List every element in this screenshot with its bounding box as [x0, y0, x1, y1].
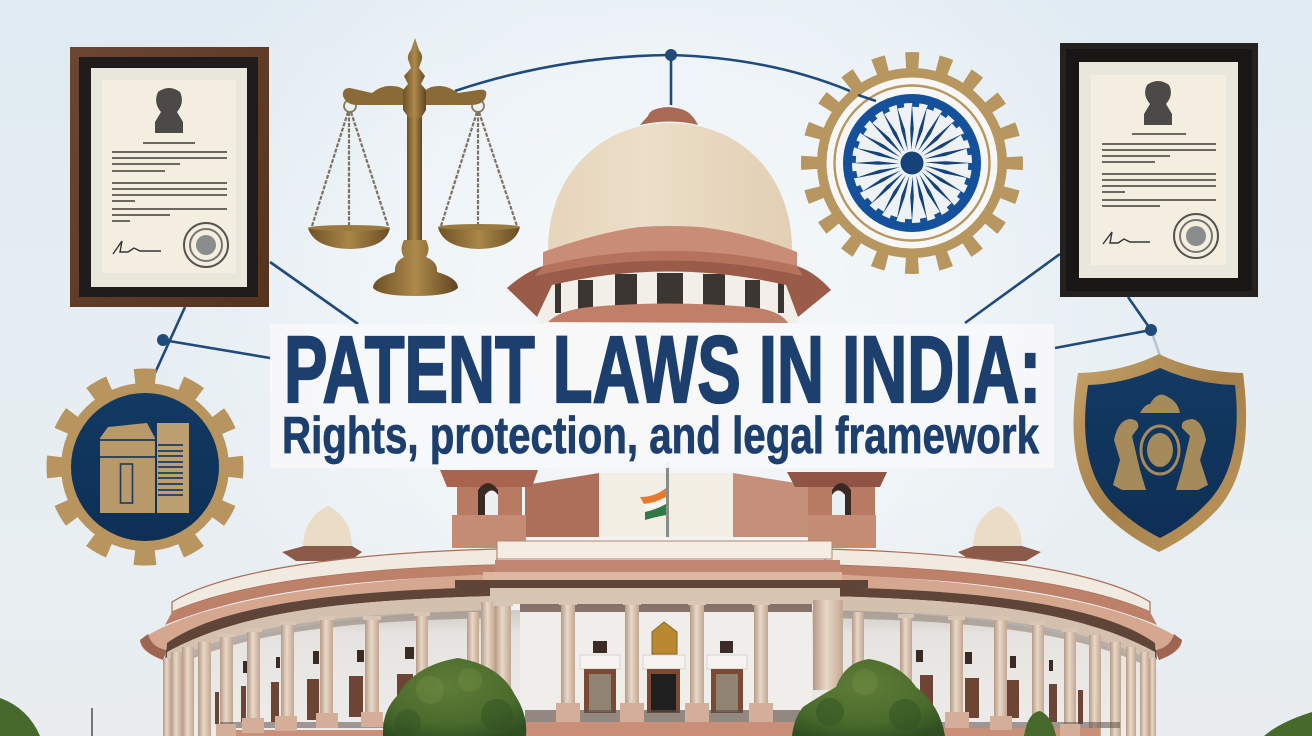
curved roof bands left	[140, 549, 497, 670]
title panel	[270, 317, 1054, 468]
right tree	[792, 659, 945, 736]
document lines	[112, 143, 227, 221]
central windows	[580, 641, 747, 669]
connector end over gear	[858, 95, 876, 101]
right chhatri	[787, 472, 887, 548]
state emblem	[1144, 81, 1172, 125]
icon: gear with patent document	[55, 377, 235, 557]
corner tree and lamp left	[0, 698, 93, 736]
central doors	[584, 669, 743, 713]
drum cornice	[507, 251, 831, 317]
state emblem	[155, 88, 183, 133]
seal	[1174, 214, 1218, 258]
beam	[343, 86, 486, 105]
gold emblem	[652, 622, 677, 654]
pans	[308, 228, 390, 249]
gold crest	[1113, 395, 1208, 490]
chain rings	[344, 100, 356, 112]
base	[373, 240, 458, 296]
document lines	[1102, 134, 1216, 206]
drum band	[543, 226, 797, 269]
small tree	[1024, 711, 1056, 736]
lower tower with chhatris and flag	[440, 462, 887, 548]
chains	[312, 112, 517, 226]
flag of India	[640, 462, 669, 537]
subtitle: Rights, protection, and legal framework	[282, 407, 1039, 465]
side domes	[282, 506, 1041, 561]
columns	[163, 600, 1156, 736]
curved roof bands right	[825, 549, 1182, 670]
seal	[184, 223, 228, 267]
main circular parliament building	[140, 506, 1182, 736]
icon: framed patent certificate right	[1060, 43, 1258, 297]
chakra spokes	[853, 104, 971, 222]
icon: framed patent certificate left	[70, 47, 269, 307]
curved wall	[165, 610, 1158, 736]
dome finial	[640, 107, 698, 125]
trees	[0, 658, 1312, 736]
drum wall, windows and columns	[540, 268, 798, 323]
dome and drum of the court building	[507, 107, 831, 323]
connector lines	[155, 49, 1160, 373]
side windows and doors	[215, 647, 1083, 724]
corner tree right	[1264, 712, 1312, 736]
icon: scales of justice	[308, 38, 520, 296]
dome	[548, 123, 792, 250]
plinth, bases and railings	[216, 703, 1120, 736]
column capitals	[218, 601, 1078, 637]
central raised parapet	[455, 541, 868, 604]
left chhatri	[440, 470, 538, 548]
finial and block	[403, 38, 426, 118]
signature	[1103, 232, 1150, 244]
icon: gear with Ashoka chakra	[810, 62, 1014, 264]
signature	[113, 241, 161, 254]
central bay wall	[520, 604, 812, 736]
document glyph	[100, 423, 189, 513]
pole	[407, 115, 422, 240]
icon: navy shield with emblem	[1074, 354, 1246, 552]
left tree	[383, 658, 526, 736]
